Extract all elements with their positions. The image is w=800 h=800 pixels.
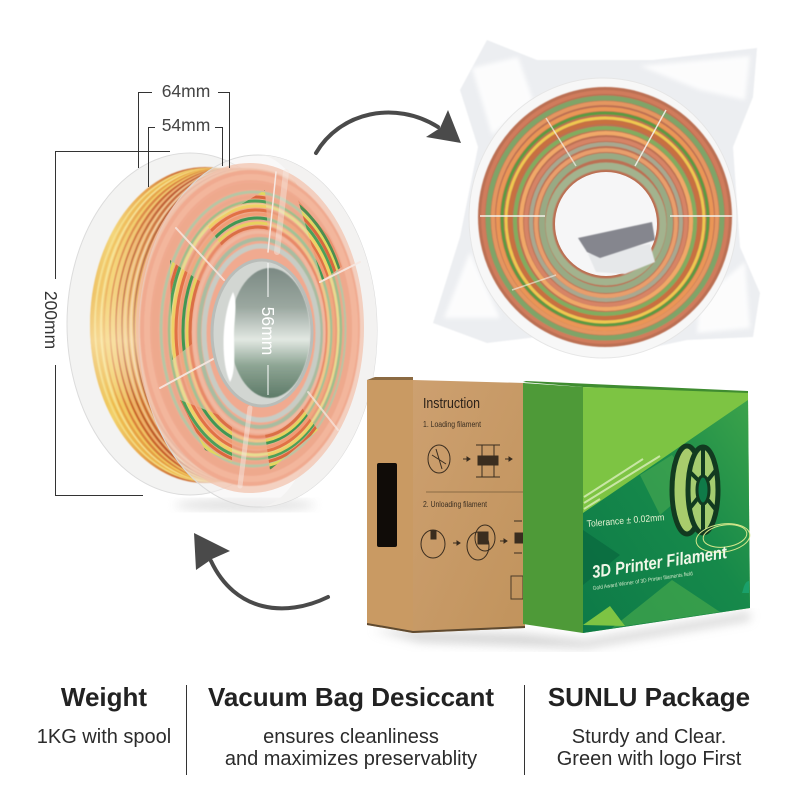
vacuum bag <box>433 40 760 358</box>
stripes <box>584 456 660 509</box>
coil graphic <box>694 520 752 556</box>
main spool <box>67 153 377 511</box>
slot <box>377 463 397 547</box>
flange right rim <box>258 155 377 507</box>
side face <box>523 383 583 633</box>
front filament rings <box>140 170 360 486</box>
caption: sunlu package: SUNLU Package <box>548 682 750 712</box>
loading diagram <box>428 445 512 477</box>
box spool graphic <box>672 446 718 534</box>
caption: sunlu package <box>548 682 750 770</box>
top edge <box>523 381 748 394</box>
divider right <box>524 685 525 775</box>
bag highlights <box>444 56 750 333</box>
caption: weight <box>37 682 171 748</box>
arrow: box to spool <box>194 533 328 608</box>
facets <box>583 455 720 628</box>
bag film <box>433 40 760 350</box>
handling marks <box>511 576 523 599</box>
hub interior <box>212 260 312 406</box>
desiccant packet <box>578 222 655 274</box>
tolerance text: Tolerance ± 0.02mm <box>586 512 665 530</box>
caption: sunlu package: Sturdy and Clear. <box>572 726 726 748</box>
box title: 3D Printer Filament <box>591 542 729 582</box>
divider <box>426 491 523 493</box>
green box <box>523 381 752 633</box>
peach halo of front filament <box>136 163 364 493</box>
arrow: spool to bag <box>316 110 461 153</box>
caption: weight: Weight <box>61 682 147 712</box>
caption: sunlu package: Green with logo First <box>557 748 741 770</box>
unloading caption: 2. Unloading filament <box>423 500 488 509</box>
divider left <box>186 685 187 775</box>
caption: weight: 1KG with spool <box>37 726 171 748</box>
dark diagonal panel <box>583 400 750 633</box>
caption: vacuum bag desiccant <box>208 682 494 770</box>
label: 54mm: 54mm <box>162 115 210 135</box>
spool shadow <box>175 499 315 511</box>
caption: vacuum bag desiccant: Vacuum Bag Desiccant <box>208 682 494 712</box>
bag spool flange <box>469 78 737 358</box>
kraft box <box>367 377 750 648</box>
loading caption: 1. Loading filament <box>423 420 482 429</box>
box logo <box>742 581 749 593</box>
front flange <box>139 155 377 507</box>
front face <box>583 387 750 633</box>
kraft faces <box>367 380 413 633</box>
spool spokes <box>160 172 360 486</box>
rear flange <box>67 153 313 495</box>
instruction title: Instruction <box>423 395 480 412</box>
wound filament side <box>90 167 361 483</box>
hole <box>555 172 657 276</box>
label: 200mm: 200mm <box>41 291 61 349</box>
dimension lines <box>56 92 268 496</box>
bag spool spokes <box>480 110 733 290</box>
bag spool rings <box>478 87 732 347</box>
caption: vacuum bag desiccant: ensures cleanliness <box>263 726 439 748</box>
box subtitle: Gold Award Winner of 3D Printer filaments field <box>592 571 693 592</box>
saturated filament windows <box>170 190 342 470</box>
hub opening <box>224 292 236 382</box>
unloading diagram <box>421 521 523 560</box>
label: 64mm: 64mm <box>162 81 210 101</box>
label: 56mm: 56mm <box>258 307 278 355</box>
box shadow <box>372 612 750 648</box>
caption: vacuum bag desiccant: and maximizes preservablity <box>225 748 477 770</box>
